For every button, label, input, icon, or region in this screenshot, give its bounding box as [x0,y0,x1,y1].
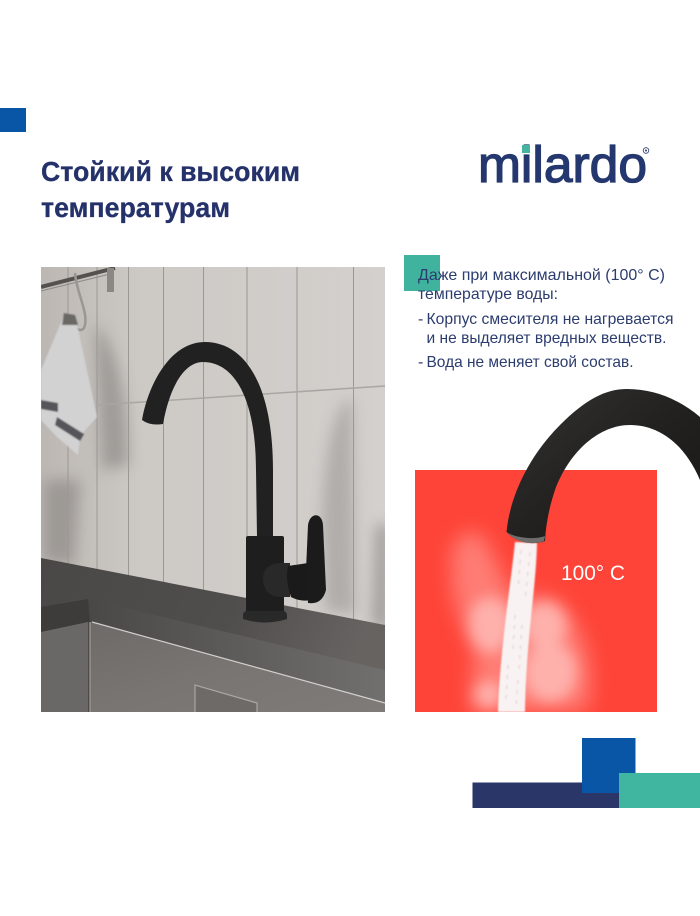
description paragraph: - [418,311,423,328]
description paragraph: температуре воды: [418,286,558,303]
teal accent square [404,255,440,291]
title [41,156,300,223]
description paragraph: - [418,354,423,371]
spout close-up [506,389,700,543]
faucet [142,342,326,622]
water stream [498,542,537,712]
logo: milardo: milardo [478,136,647,193]
title: температурам [41,192,230,223]
hanging towel [41,313,97,455]
photo: black kitchen faucet [41,267,390,712]
temperature label: 100° С [561,562,625,585]
countertop [41,558,385,712]
towel rail [41,268,115,330]
steam cloud [452,532,591,712]
decorative block group [472,738,700,808]
description paragraph: Даже при максимальной (100° С) [418,267,665,284]
tiled wall [41,267,390,637]
description paragraph: и не выделяет вредных веществ. [426,330,666,347]
red temperature panel [415,470,657,712]
body text [404,255,674,371]
title: Стойкий к высоким [41,156,300,187]
blue corner square [0,108,26,132]
description paragraph [418,267,674,371]
description paragraph: Корпус смесителя не нагревается [426,311,674,328]
description paragraph: Вода не меняет свой состав. [426,354,634,371]
